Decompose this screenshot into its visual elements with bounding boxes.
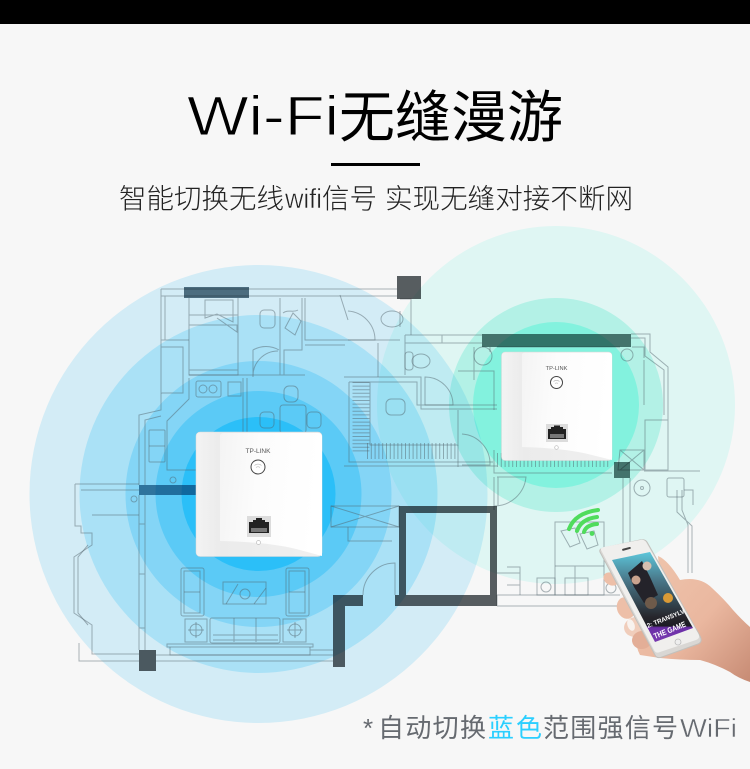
blue signal rings	[30, 265, 488, 723]
status LED	[256, 540, 260, 544]
subtitle: 实现无缝对接不断网	[385, 183, 633, 214]
home button	[675, 639, 681, 645]
status LED	[555, 446, 558, 449]
device face highlight	[220, 433, 322, 556]
footnote: WiFi	[680, 713, 737, 743]
screen caption	[646, 608, 688, 641]
footnote: 自动切换	[378, 713, 486, 743]
plan: upper right rooms	[458, 334, 700, 557]
title	[187, 84, 563, 149]
ethernet port	[247, 516, 271, 537]
wifi button	[550, 376, 562, 388]
hand palm	[636, 556, 750, 682]
phone screen	[612, 552, 693, 642]
footnote: 范围强信号	[543, 713, 678, 743]
screen caption: THE GAME	[652, 620, 688, 641]
phone	[600, 540, 701, 658]
fingers	[601, 570, 653, 651]
footnote: 蓝色	[488, 713, 542, 743]
finger nail	[626, 618, 636, 632]
subtitle: 信号	[322, 183, 377, 214]
wifi button	[251, 460, 265, 474]
footnote: *	[363, 713, 373, 743]
brand label: TP-LINK	[246, 448, 271, 455]
phone face	[601, 540, 699, 653]
subtitle	[119, 183, 633, 214]
device: left wall access point	[196, 432, 322, 556]
earpiece	[622, 547, 631, 551]
plan: dark structural walls	[139, 276, 631, 671]
title: 无缝漫游	[339, 86, 563, 149]
device face highlight	[522, 352, 612, 460]
icon: green wifi signal	[569, 510, 598, 536]
plan: central bathroom and corridor	[340, 295, 497, 467]
hand holding phone	[601, 556, 750, 682]
brand label: TP-LINK	[546, 366, 568, 372]
subtitle: 智能切换无线	[119, 183, 284, 214]
plan: lower right bedroom	[497, 490, 693, 606]
floor plan line drawing	[74, 289, 700, 661]
device: right wall access point	[502, 352, 612, 460]
top black band	[0, 0, 750, 24]
title: Wi-Fi	[187, 84, 339, 147]
phone body	[600, 540, 701, 658]
green signal rings	[377, 226, 735, 584]
screen caption: 2: TRANSYLV	[646, 608, 686, 630]
plan: upper left bedroom and kitchen	[131, 289, 400, 502]
footnote	[363, 713, 737, 743]
screen characters	[628, 561, 673, 609]
title divider	[331, 163, 420, 166]
ethernet port	[546, 424, 568, 442]
plan: left balcony and lounge	[74, 484, 399, 661]
subtitle: wifi	[284, 183, 322, 214]
